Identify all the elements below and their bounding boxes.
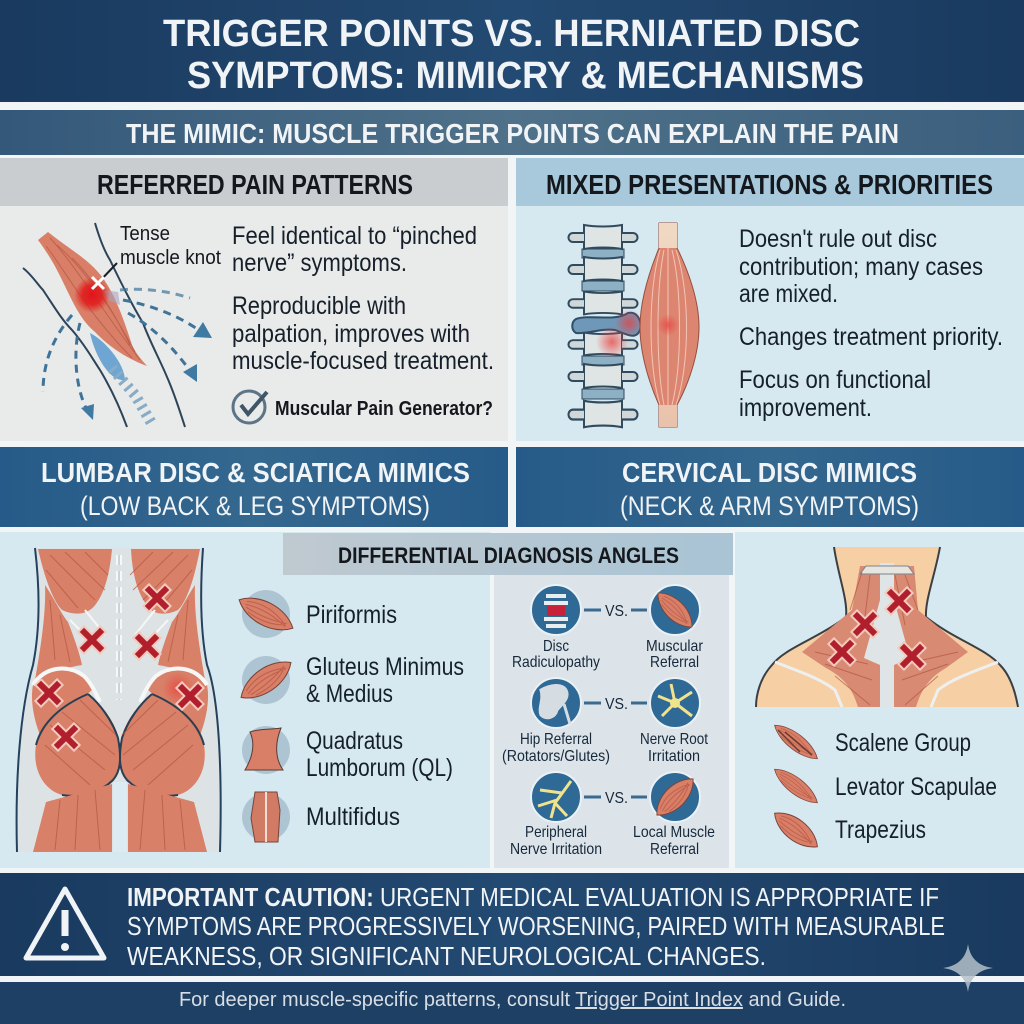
section header: lumbar: (LOW BACK & LEG SYMPTOMS) bbox=[80, 491, 430, 521]
text block: rule out disc bbox=[739, 225, 983, 308]
section header: lumbar bbox=[0, 447, 508, 527]
comparison row: peripheral vs local muscle: Referral bbox=[650, 841, 699, 858]
comparison row: disc vs muscular: Disc bbox=[543, 638, 569, 655]
comparison row: disc vs muscular: Radiculopathy bbox=[512, 654, 600, 671]
legend: quadratus lumborum: Lumborum (QL) bbox=[306, 754, 453, 782]
legend: scalene group: Scalene Group bbox=[835, 729, 971, 757]
title: TRIGGER POINTS VS. HERNIATED DISC bbox=[163, 13, 860, 55]
illustration: low back and glutes bbox=[17, 548, 221, 852]
legend: levator scapulae bbox=[770, 763, 997, 809]
panel: cervical muscles bbox=[735, 532, 1024, 868]
legend: piriformis: Piriformis bbox=[306, 601, 397, 629]
legend: gluteus: Gluteus Minimus bbox=[306, 653, 464, 681]
comparison row: peripheral vs local muscle bbox=[510, 771, 715, 858]
panel: mixed presentations bbox=[516, 158, 1024, 441]
comparison row: peripheral vs local muscle: Nerve Irritation bbox=[510, 841, 602, 858]
comparison row: hip vs nerve root: Nerve Root bbox=[640, 731, 708, 748]
comparison row: hip vs nerve root bbox=[502, 678, 708, 765]
text block: functional improvement: Focus on functional bbox=[739, 366, 931, 394]
comparison row: peripheral vs local muscle: Local Muscle bbox=[633, 824, 715, 841]
comparison row: hip vs nerve root: (Rotators/Glutes) bbox=[502, 748, 610, 765]
section header: lumbar: LUMBAR DISC & SCIATICA MIMICS bbox=[41, 457, 470, 488]
comparison row: disc vs muscular bbox=[512, 585, 704, 671]
illustration: muscle knot with referred pain bbox=[23, 223, 212, 427]
comparison row: peripheral vs local muscle: VS. bbox=[605, 790, 628, 807]
heading: differential diagnosis: DIFFERENTIAL DIAGNOSIS ANGLES bbox=[338, 543, 679, 568]
title: SYMPTOMS: MIMICRY & MECHANISMS bbox=[187, 55, 864, 97]
text block: rule out disc: are mixed. bbox=[739, 280, 838, 308]
illustration: spine and muscle bbox=[568, 223, 699, 427]
title bbox=[0, 0, 1024, 102]
footer: For deeper muscle-specific patterns, consult Trigger Point Index and Guide. bbox=[179, 989, 846, 1011]
panel: referred pain patterns bbox=[0, 158, 508, 441]
legend: scalene group bbox=[770, 719, 971, 765]
legend: trapezius: Trapezius bbox=[835, 816, 926, 844]
heading: referred pain patterns: REFERRED PAIN PATTERNS bbox=[97, 169, 413, 200]
icon: warning triangle bbox=[26, 889, 104, 958]
caution banner bbox=[0, 873, 1024, 976]
section header: cervical bbox=[516, 447, 1024, 527]
legend: quadratus lumborum: Quadratus bbox=[306, 727, 403, 755]
comparison row: disc vs muscular: Referral bbox=[650, 654, 699, 671]
comparison row: hip vs nerve root: Irritation bbox=[648, 748, 700, 765]
text block: functional improvement: improvement. bbox=[739, 394, 872, 422]
comparison row: hip vs nerve root: Hip Referral bbox=[520, 731, 592, 748]
caution text bbox=[127, 882, 945, 971]
footer bbox=[0, 982, 1024, 1024]
text block: pinched nerve bbox=[232, 222, 477, 277]
legend: multifidus: Multifidus bbox=[306, 803, 400, 831]
legend: gluteus bbox=[234, 653, 464, 708]
text block: pinched nerve: Feel identical to “pinched bbox=[232, 222, 477, 250]
caution text: IMPORTANT CAUTION: URGENT MEDICAL EVALUATION IS APPROPRIATE IF bbox=[127, 882, 939, 912]
text block: functional improvement bbox=[739, 366, 931, 422]
comparison row: disc vs muscular: VS. bbox=[605, 603, 628, 620]
text block: rule out disc: Doesn't rule out disc bbox=[739, 225, 937, 253]
panel: lumbar muscles bbox=[0, 532, 490, 868]
label: muscular pain generator: Muscular Pain Generator? bbox=[275, 398, 493, 420]
text block: palpation: palpation, improves with bbox=[232, 320, 470, 348]
comparison row: hip vs nerve root: VS. bbox=[605, 696, 628, 713]
text block: rule out disc: contribution; many cases bbox=[739, 253, 983, 281]
legend: gluteus: & Medius bbox=[306, 680, 393, 708]
text block: pinched nerve: nerve” symptoms. bbox=[232, 249, 407, 277]
text block: palpation: Reproducible with bbox=[232, 292, 406, 320]
subtitle banner: THE MIMIC: MUSCLE TRIGGER POINTS CAN EXPLAIN THE PAIN bbox=[126, 118, 899, 149]
section header: cervical: (NECK & ARM SYMPTOMS) bbox=[620, 491, 919, 521]
callout: tense muscle knot: Tense bbox=[120, 223, 170, 245]
legend: piriformis bbox=[234, 590, 397, 638]
comparison row: peripheral vs local muscle: Peripheral bbox=[525, 824, 587, 841]
legend: multifidus bbox=[242, 792, 400, 842]
callout: tense muscle knot: muscle knot bbox=[120, 247, 221, 269]
legend: trapezius bbox=[768, 805, 926, 855]
caution text: WEAKNESS, OR SIGNIFICANT NEUROLOGICAL CHANGES. bbox=[127, 941, 766, 971]
legend: levator scapulae: Levator Scapulae bbox=[835, 773, 997, 801]
icon: check mark bbox=[233, 391, 267, 423]
icon: sparkle watermark bbox=[943, 944, 993, 992]
comparison row: disc vs muscular: Muscular bbox=[646, 638, 704, 655]
callout: tense muscle knot bbox=[120, 223, 221, 269]
subtitle banner bbox=[0, 110, 1024, 155]
panel: differential diagnosis angles bbox=[283, 533, 733, 868]
legend: quadratus lumborum bbox=[242, 726, 453, 782]
section header: cervical: CERVICAL DISC MIMICS bbox=[622, 457, 917, 488]
text block: palpation bbox=[232, 292, 494, 375]
text block: palpation: muscle-focused treatment. bbox=[232, 347, 494, 375]
illustration: neck and shoulders bbox=[756, 547, 1018, 707]
